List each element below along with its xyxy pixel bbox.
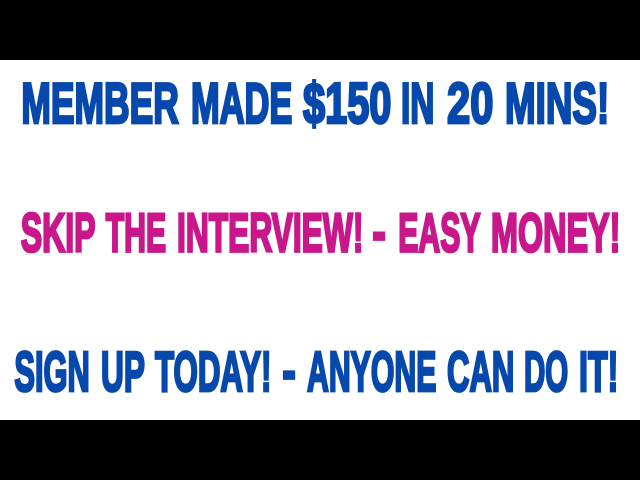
- headline: sign up today: -: [282, 339, 296, 402]
- headline: member made $150: IN: [401, 72, 434, 136]
- bottom black bar: [0, 420, 640, 480]
- white panel: [0, 60, 640, 420]
- top black bar: [0, 0, 640, 60]
- headline: member made $150: [21, 72, 609, 136]
- headline: sign up today: [14, 339, 618, 403]
- headline: sign up today: UP: [101, 340, 145, 403]
- headline: skip the interview: [21, 200, 620, 264]
- headline: sign up today: ANYONE: [307, 340, 436, 403]
- headline: sign up today: SIGN: [14, 340, 90, 403]
- headline: skip the interview: INTERVIEW!: [177, 202, 363, 264]
- headline: skip the interview: SKIP: [21, 202, 96, 264]
- headline: skip the interview: THE: [106, 202, 166, 264]
- headline: skip the interview: EASY: [398, 202, 480, 264]
- headline: member made $150: MEMBER: [21, 72, 179, 136]
- headline: sign up today: CAN: [447, 340, 514, 403]
- headline: member made $150: MADE: [191, 72, 292, 136]
- headline: member made $150: 20: [447, 72, 493, 136]
- headline: sign up today: TODAY!: [155, 340, 271, 403]
- headline: sign up today: DO: [524, 340, 568, 403]
- headline: member made $150: $150: [303, 72, 391, 136]
- headline: skip the interview: -: [372, 200, 386, 262]
